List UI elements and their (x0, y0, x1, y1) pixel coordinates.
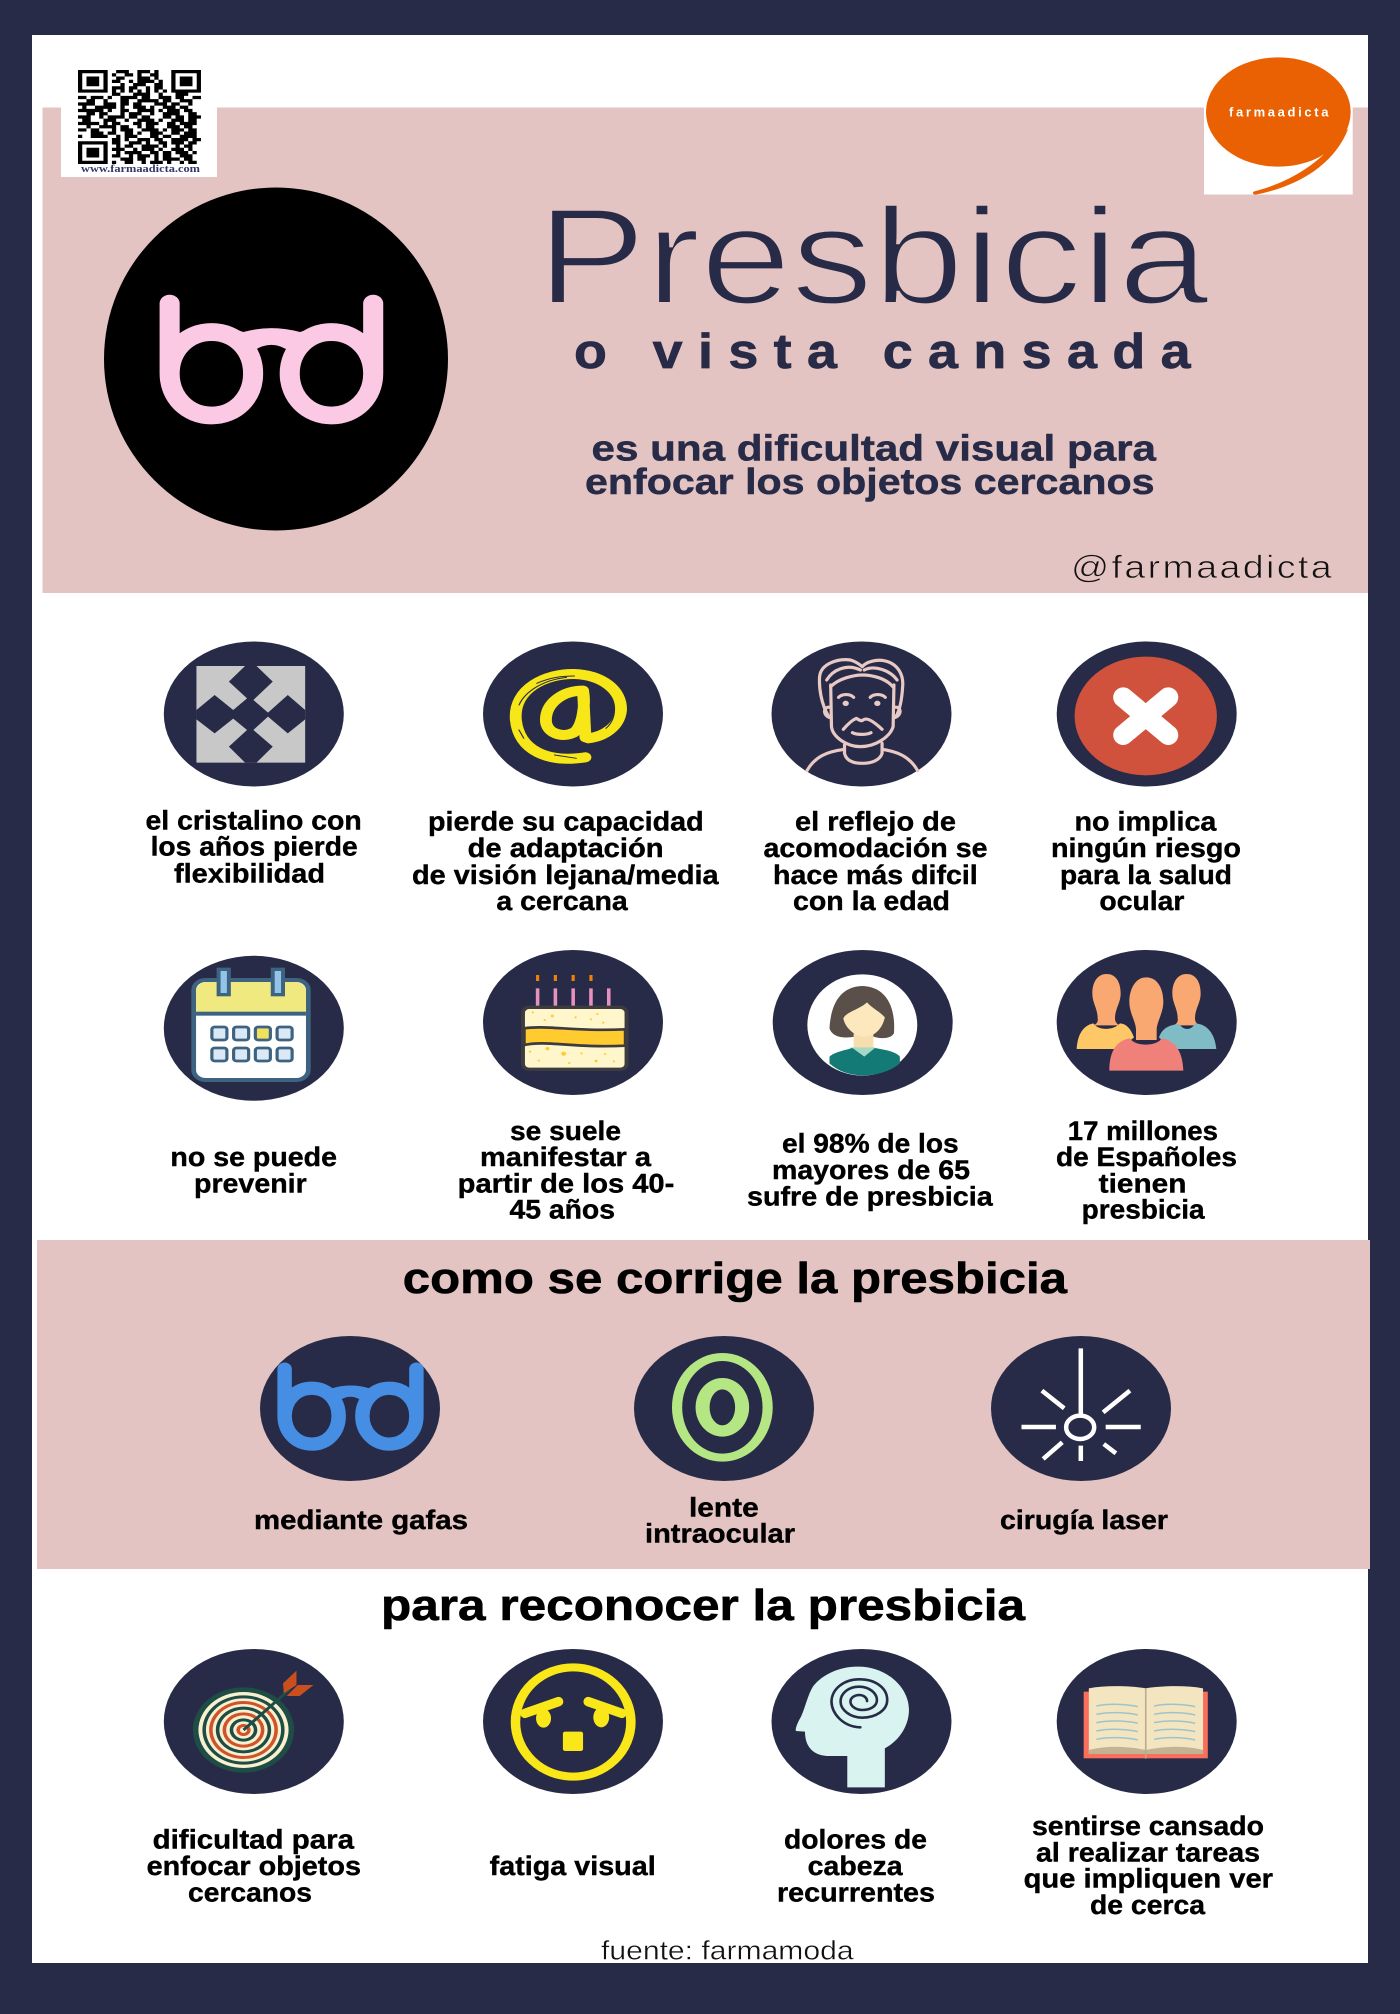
icon: three people (1057, 950, 1237, 1095)
panel: facts row 1 (146, 642, 1241, 916)
caption: sufre de presbicia (747, 1181, 994, 1211)
icon: target with dart (164, 1649, 344, 1794)
item: lente intraocular (634, 1336, 814, 1549)
caption (777, 1824, 935, 1907)
heading: para reconocer la presbicia (381, 1581, 1026, 1630)
item: cansancio al ver de cerca (1024, 1649, 1274, 1920)
caption: ocular (1099, 886, 1185, 916)
caption: cercanos (188, 1877, 312, 1907)
caption: ningún riesgo (1051, 833, 1241, 863)
caption (764, 807, 988, 916)
caption: de cerca (1090, 1890, 1206, 1920)
caption: manifestar a (480, 1142, 652, 1172)
logo: farmaadicta bubble: farmaadicta (1229, 104, 1329, 120)
panel: para reconocer (147, 1581, 1274, 1920)
caption: de adaptación (468, 833, 664, 863)
item: reflejo de acomodacion (764, 642, 988, 916)
caption: fatiga visual (490, 1851, 656, 1881)
item: capacidad de adaptacion (412, 642, 720, 916)
caption: dolores de (784, 1824, 927, 1854)
caption: recurrentes (777, 1877, 935, 1907)
icon: older man (772, 642, 952, 786)
caption: con la edad (793, 886, 950, 916)
caption: pierde su capacidad (428, 807, 704, 837)
caption: partir de los 40- (458, 1168, 674, 1198)
caption: de Españoles (1056, 1142, 1237, 1172)
caption: sentirse cansado (1032, 1811, 1264, 1841)
icon: lens rings (634, 1336, 814, 1481)
caption (645, 1493, 796, 1549)
definition text (585, 428, 1157, 502)
caption: al realizar tareas (1036, 1837, 1260, 1867)
item: 17 millones (1056, 950, 1237, 1225)
definition text: enfocar los objetos cercanos (585, 461, 1154, 502)
caption: los años pierde (151, 832, 358, 862)
icon: woman portrait (773, 950, 953, 1095)
item: 98 por ciento (747, 950, 994, 1211)
caption (1051, 807, 1241, 916)
caption (458, 1116, 674, 1225)
icon: pink glasses in black circle (104, 188, 448, 530)
icon: birthday cake (483, 950, 663, 1095)
item: cirugia laser (991, 1336, 1171, 1535)
caption: a cercana (496, 886, 629, 916)
source note: fuente: farmamoda (601, 1935, 855, 1965)
caption: cirugía laser (1000, 1505, 1169, 1535)
caption: lente (689, 1493, 759, 1523)
QR code (61, 70, 217, 177)
icon: tired face (483, 1649, 663, 1794)
caption: mayores de 65 (772, 1155, 970, 1185)
caption: 17 millones (1068, 1116, 1218, 1146)
title: Presbicia (537, 180, 1210, 334)
caption (146, 805, 362, 888)
caption (170, 1142, 337, 1198)
caption: el reflejo de (795, 807, 956, 837)
caption: enfocar objetos (147, 1851, 361, 1881)
item: cristalino (146, 642, 362, 888)
item: prevencion (164, 956, 344, 1198)
QR code: www.farmaadicta.com (81, 164, 201, 175)
caption: tienen (1099, 1168, 1186, 1198)
caption: intraocular (645, 1519, 796, 1549)
caption: no se puede (170, 1142, 337, 1172)
caption: de visión lejana/media (412, 860, 720, 890)
item: dolores de cabeza (772, 1649, 952, 1907)
caption: dificultad para (153, 1824, 355, 1854)
caption: mediante gafas (254, 1505, 468, 1535)
icon: expanding arrows (164, 642, 344, 786)
icon: laser burst (991, 1336, 1171, 1481)
caption (1056, 1116, 1237, 1225)
caption: prevenir (194, 1168, 307, 1198)
caption: para la salud (1060, 860, 1232, 890)
icon: scribbled at sign (483, 642, 663, 786)
caption (412, 807, 720, 916)
caption (747, 1129, 994, 1211)
caption: hace más difcil (773, 860, 978, 890)
panel: header (42, 57, 1368, 593)
icon: open book (1057, 1649, 1237, 1794)
caption: se suele (510, 1116, 621, 1146)
caption: acomodación se (764, 833, 988, 863)
panel: como se corrige (37, 1240, 1370, 1569)
icon: blue glasses (260, 1336, 440, 1481)
caption: presbicia (1082, 1195, 1206, 1225)
heading: como se corrige la presbicia (403, 1254, 1068, 1303)
item: gafas (254, 1336, 468, 1535)
item: sin riesgo (1051, 642, 1241, 916)
icon: head with spiral (772, 1649, 952, 1794)
caption: cabeza (808, 1851, 904, 1881)
caption: 45 años (510, 1195, 615, 1225)
item: dificultad para enfocar (147, 1649, 361, 1907)
item: edad de inicio (458, 950, 674, 1225)
item: fatiga visual (483, 1649, 663, 1881)
caption (147, 1824, 361, 1907)
social handle: @farmaadicta (1071, 549, 1334, 585)
subtitle: o vista cansada (574, 325, 1206, 379)
caption: no implica (1074, 807, 1217, 837)
caption: el cristalino con (146, 805, 362, 835)
caption (1024, 1811, 1274, 1920)
caption: el 98% de los (782, 1129, 959, 1159)
logo: farmaadicta bubble (1204, 57, 1353, 195)
caption: flexibilidad (174, 858, 325, 888)
icon: red cross (1057, 642, 1237, 786)
definition text: es una dificultad visual para (592, 428, 1157, 468)
panel: facts row 2 (164, 950, 1237, 1225)
icon: calendar (164, 956, 344, 1101)
caption: que impliquen ver (1024, 1864, 1274, 1894)
